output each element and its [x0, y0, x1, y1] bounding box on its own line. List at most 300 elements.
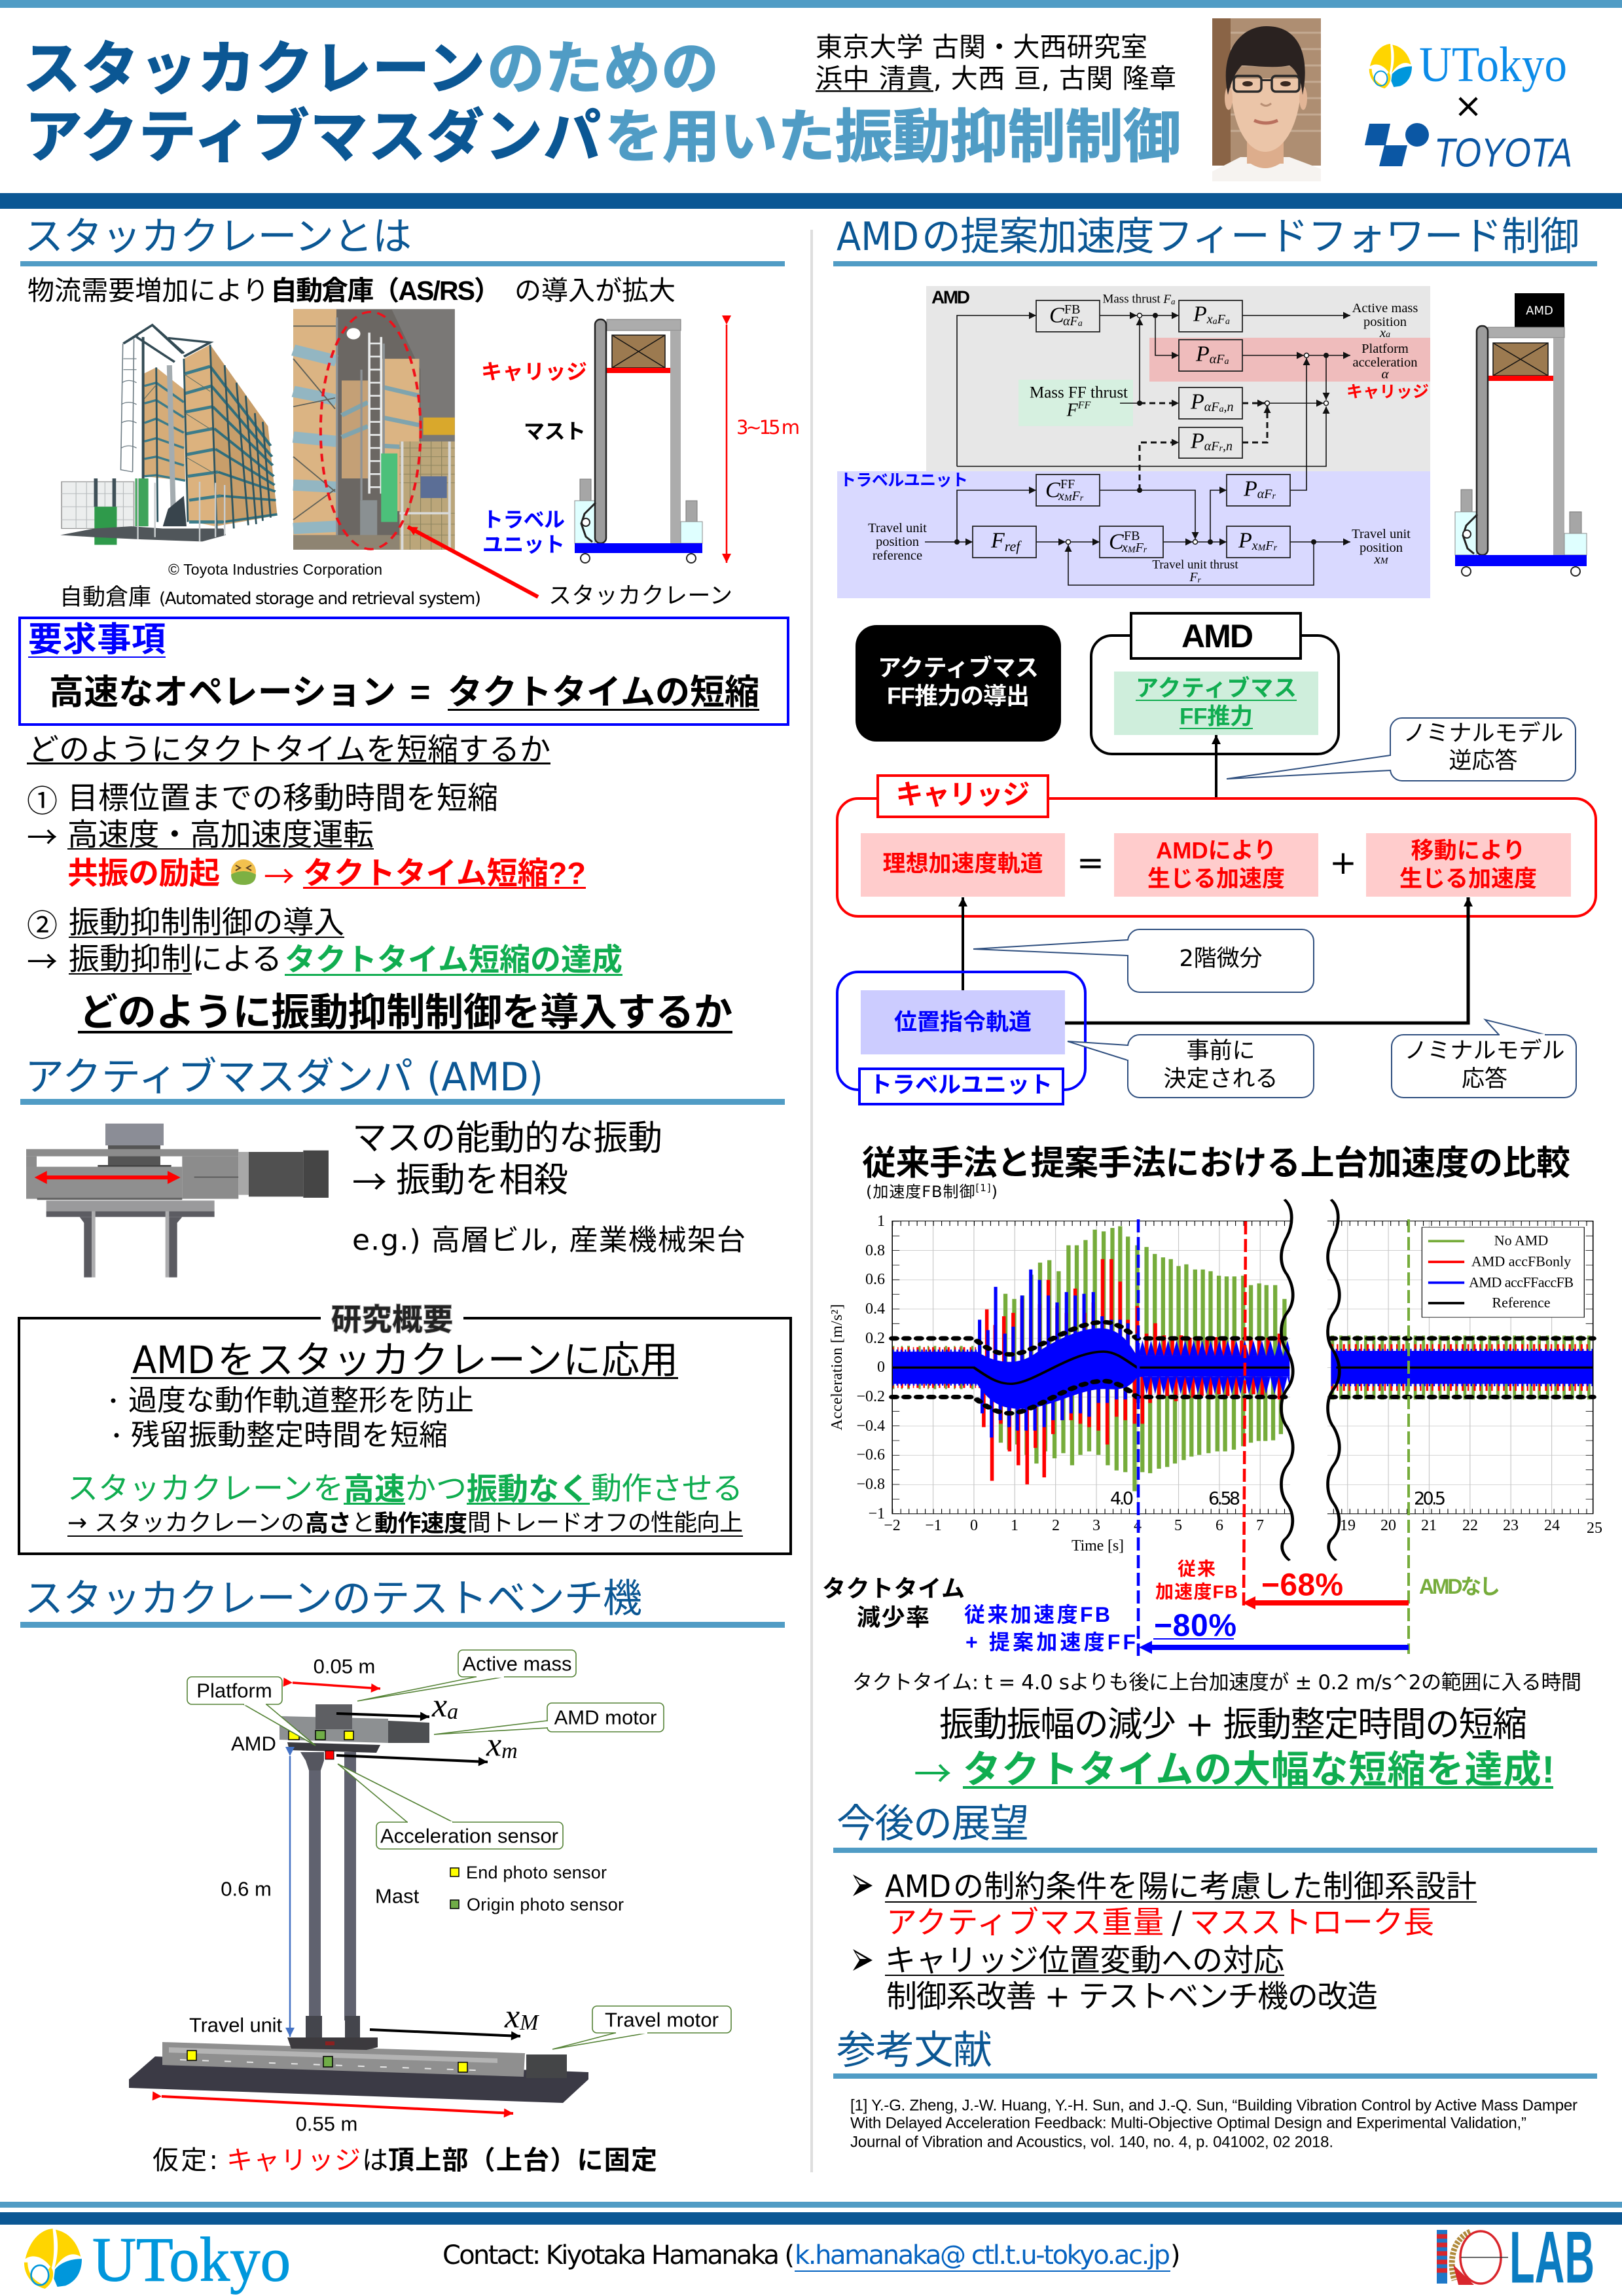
block labels: a	[1224, 356, 1229, 367]
crane labels	[60, 360, 800, 611]
block labels: x	[1206, 312, 1213, 327]
reference text: With Delayed Acceleration Feedback: Multi-Objective Optimal Design and Experimental Validation,”	[850, 2114, 1526, 2132]
block labels: P	[1191, 429, 1204, 453]
block labels: FB	[1064, 302, 1080, 317]
crane labels: 自動倉庫	[60, 584, 151, 611]
x axis labels: 7	[1256, 1517, 1264, 1534]
icon: sick emoji	[231, 859, 256, 885]
arrows from travel unit	[963, 897, 1468, 1023]
tact time reduction: 減少率	[857, 1604, 929, 1631]
callout: travel motor: Travel motor	[605, 2008, 719, 2032]
signal labels: Travel unit	[868, 521, 927, 535]
overview main statement: をスタッカクレーンに応用	[217, 1338, 678, 1382]
block labels: FF	[1060, 477, 1075, 492]
photo: warehouse	[60, 325, 278, 545]
assumption text: 仮定:	[153, 2145, 218, 2176]
callout: nominal inverse: 逆応答	[1449, 748, 1517, 774]
bench labels: Mast	[375, 1885, 420, 1907]
callout: nominal response	[1392, 1020, 1576, 1098]
crane labels: (Automated storage and retrieval system)	[159, 589, 481, 609]
x axis labels: 25	[1587, 1520, 1602, 1537]
overview bullets	[111, 1384, 474, 1452]
carriage group: 生じる加速度	[1147, 867, 1285, 891]
block labels: ,n	[1223, 439, 1233, 454]
AMD group: アクティブマス	[1136, 675, 1297, 702]
block labels: r	[1274, 543, 1278, 552]
chart legend	[1422, 1227, 1584, 1318]
text block: how to shorten tact time: タクトタイム短縮??	[303, 856, 586, 890]
callout: second derivative	[973, 929, 1314, 992]
chart title: )	[992, 1183, 998, 1201]
signal labels: position	[1360, 541, 1403, 555]
bullet one: マスストローク長	[1189, 1905, 1434, 1941]
assumption text: 頂上部（上台）に固定	[388, 2146, 657, 2175]
text block: how to shorten tact time	[27, 732, 622, 982]
bullet one	[853, 1869, 1477, 1941]
block diagram: トラベルユニット	[840, 471, 968, 490]
block diagram: キャリッジ	[1346, 383, 1429, 401]
y axis labels: 0.4	[865, 1300, 885, 1318]
intro text: の導入が拡大	[514, 275, 676, 306]
settling markers: 4.0	[1110, 1488, 1134, 1509]
intro text: 自動倉庫（AS/RS）	[270, 276, 501, 306]
conclusion: 振動振幅の減少 + 振動整定時間の短縮	[939, 1704, 1527, 1745]
block labels: F	[991, 529, 1005, 552]
column divider	[810, 230, 813, 2172]
overview conclusion: 振動なく	[467, 1471, 590, 1507]
crane labels: マスト	[524, 420, 586, 443]
AMD group	[1091, 613, 1339, 754]
y axis labels: −0.8	[856, 1476, 885, 1493]
axis break	[1281, 1197, 1339, 1562]
overview conclusion: 動作させる	[591, 1471, 743, 1507]
title: のための	[487, 37, 719, 101]
series: no AMD	[892, 1226, 1593, 1491]
block labels: F	[1072, 489, 1081, 503]
authors	[816, 31, 1176, 94]
x axis labels: 23	[1503, 1517, 1519, 1534]
block labels: P	[1193, 302, 1207, 326]
block labels: x	[1058, 489, 1064, 503]
legend labels: AMD accFBonly	[1471, 1253, 1571, 1270]
footer bars	[0, 2202, 1622, 2225]
tact time reduction: −68%	[1261, 1568, 1343, 1602]
legend labels	[1469, 1232, 1574, 1310]
heading: の提案加速度フィードフォワード制御	[922, 214, 1579, 260]
carriage group: 理想加速度軌道	[882, 851, 1043, 877]
title	[23, 37, 1181, 169]
signal labels: F	[1067, 401, 1078, 420]
tact time definition: タクトタイム: t = 4.0 sよりも後に上台加速度が ± 0.2 m/s^2の範囲に入る時間	[852, 1671, 1581, 1695]
panel: research overview	[19, 1302, 791, 1554]
callout: acceleration sensor	[338, 1764, 563, 1849]
signal labels: x	[1380, 325, 1386, 340]
reference and tolerance curves	[892, 1322, 1593, 1413]
settling markers: 20.5	[1414, 1488, 1446, 1509]
panel: acceleration comparison	[822, 1145, 1602, 1799]
header bottom bar	[0, 193, 1622, 209]
crane labels: ユニット	[482, 533, 565, 556]
logo: Toyota	[1365, 123, 1572, 175]
block labels: r	[1272, 491, 1276, 501]
panel: active mass damper	[20, 1054, 785, 1278]
heading: AMD	[837, 214, 919, 260]
contact	[442, 2240, 1181, 2272]
callout: platform: Platform	[196, 1679, 272, 1702]
intro text	[27, 275, 676, 306]
signal labels: position	[1363, 315, 1407, 329]
text block: how to shorten tact time: による	[192, 941, 282, 978]
bench labels: x	[432, 1687, 447, 1724]
key question: どのように振動抑制制御を導入するか	[79, 991, 732, 1034]
bullet two	[853, 1943, 1378, 2015]
crane labels: © Toyota Industries Corporation	[168, 561, 382, 578]
x axis labels: 1	[1011, 1517, 1018, 1534]
contact: Contact: Kiyotaka Hamanaka (	[442, 2240, 795, 2270]
signal labels: FF	[1077, 399, 1091, 411]
block labels: r	[1080, 493, 1084, 503]
tact time reduction: 従来	[1178, 1559, 1216, 1579]
bench labels: AMD	[231, 1732, 276, 1755]
signal lines	[925, 313, 1350, 585]
control blocks	[973, 300, 1290, 558]
chart title: (加速度FB制御	[866, 1183, 975, 1201]
bench labels: 0.6 m	[221, 1877, 272, 1901]
logo: Toyota: TOYOTA	[1434, 131, 1572, 175]
diagram: crane with AMD	[1455, 293, 1587, 576]
y axis labels	[829, 1213, 885, 1522]
x axis labels: −2	[884, 1517, 901, 1534]
chart title: [1]	[975, 1182, 991, 1194]
overview conclusion: 高さ	[305, 1509, 351, 1537]
callout: predetermined: 決定される	[1164, 1066, 1278, 1092]
contact: )	[1170, 2240, 1181, 2270]
block labels: a	[1225, 317, 1230, 326]
bench labels: m	[501, 1738, 518, 1763]
sensor legend	[450, 1863, 624, 1914]
tact time reduction: AMDなし	[1419, 1575, 1500, 1598]
overview conclusion: スタッカクレーンを	[67, 1471, 344, 1507]
photo: portrait	[1212, 18, 1321, 181]
x axis labels: 24	[1544, 1517, 1560, 1534]
text: AMD description	[352, 1118, 746, 1257]
block labels: r	[1219, 444, 1223, 453]
block labels: C	[1045, 478, 1060, 503]
signal labels: Travel unit thrust	[1152, 558, 1238, 572]
block labels: ,n	[1224, 400, 1233, 414]
bench labels: a	[447, 1699, 458, 1724]
crane labels: キャリッジ	[481, 360, 587, 384]
signal labels: reference	[873, 548, 922, 563]
block labels: r	[1144, 545, 1147, 555]
assumption text: は	[362, 2145, 388, 2176]
x axis labels: 21	[1421, 1517, 1437, 1534]
block diagram: AMD	[931, 287, 970, 308]
sensor legend: End photo sensor	[466, 1863, 607, 1882]
logo: UTokyo small: UTokyo	[1419, 37, 1567, 92]
contact: k.hamanaka@ ctl.t.u-tokyo.ac.jp	[795, 2240, 1170, 2270]
flow chart	[837, 613, 1596, 1104]
signal labels: α	[1381, 366, 1389, 382]
block labels: F	[1135, 541, 1144, 555]
block labels: αF	[1204, 400, 1219, 414]
photo: stacker crane in warehouse	[293, 309, 455, 550]
callout: AMD motor	[434, 1703, 664, 1734]
block labels: αF	[1257, 487, 1272, 501]
signal labels: x	[1375, 551, 1380, 567]
overview conclusion: → スタッカクレーンの	[67, 1509, 304, 1537]
text block: how to shorten tact time: 目標位置までの移動時間を短縮	[67, 780, 498, 817]
block labels: αF	[1063, 314, 1078, 329]
tact time reduction	[822, 1559, 1500, 1654]
black heading block: FF推力の導出	[887, 682, 1030, 709]
y axis labels: −0.6	[856, 1446, 885, 1463]
block labels: x	[1122, 541, 1128, 555]
text: AMD description: マスの能動的な振動	[352, 1118, 662, 1158]
legend labels: Reference	[1492, 1295, 1551, 1310]
x axis labels: 5	[1174, 1517, 1182, 1534]
overview conclusion: 動作速度	[374, 1509, 467, 1537]
title: アクティブマスダンパ	[25, 105, 601, 169]
chart title: 従来手法と提案手法における上台加速度の比較	[862, 1145, 1570, 1183]
carriage group: =	[1077, 844, 1104, 882]
heading: アクティブマスダンパ	[25, 1054, 413, 1100]
travel unit group: 位置指令軌道	[894, 1009, 1032, 1035]
black heading block: アクティブマス	[878, 655, 1039, 681]
y axis labels: −1	[868, 1505, 885, 1522]
y axis labels: 0.2	[865, 1330, 885, 1347]
overview bullets: 残留振動整定時間を短縮	[131, 1419, 448, 1452]
callout: travel motor	[552, 2006, 731, 2049]
y axis labels: 0.6	[865, 1271, 885, 1288]
text: AMD description: e.g.) 高層ビル, 産業機械架台	[352, 1224, 746, 1257]
bullet two: キャリッジ位置変動への対応	[885, 1943, 1284, 1979]
requirement box: 要求事項	[28, 621, 166, 659]
title: スタッカクレーン	[23, 37, 485, 101]
block labels: M	[1257, 543, 1267, 552]
panel: stacker crane intro	[20, 214, 800, 1034]
reference text: [1] Y.-G. Zheng, J.-W. Huang, Y.-H. Sun, and J.-Q. Sun, “Building Vibration Control by Active Mass Damper	[850, 2097, 1577, 2114]
text block: how to shorten tact time: →	[27, 937, 58, 982]
y axis labels: 0	[877, 1359, 885, 1376]
callout: AMD motor: AMD motor	[554, 1706, 657, 1729]
x axis labels	[884, 1517, 1602, 1554]
authors: 東京大学 古関・大西研究室	[816, 31, 1147, 63]
text block: how to shorten tact time: ①	[27, 776, 58, 821]
panel: test bench	[20, 1576, 785, 2176]
cross sign: ×	[1454, 86, 1483, 126]
bullet one: の制約条件を陽に考慮した制御系設計	[953, 1869, 1477, 1905]
callout: predetermined	[1068, 1035, 1314, 1098]
x axis labels: 0	[970, 1517, 978, 1534]
title: を用いた振動抑制制御	[605, 105, 1181, 169]
travel unit group	[837, 972, 1085, 1104]
block labels: P	[1238, 529, 1252, 552]
line chart	[892, 1197, 1593, 1562]
series: AMD acc FB only	[892, 1259, 1593, 1484]
block labels: a	[1078, 318, 1083, 329]
tact time reduction: 従来加速度FB	[964, 1603, 1110, 1626]
logo: UTokyo small	[1370, 37, 1567, 92]
block labels: C	[1049, 304, 1064, 327]
block labels: a	[1219, 404, 1224, 414]
signal labels: Mass FF thrust	[1030, 384, 1128, 402]
block labels: αF	[1204, 439, 1219, 454]
text block: how to shorten tact time: 共振の励起	[67, 856, 220, 890]
signal labels: Platform	[1361, 342, 1409, 356]
block labels: F	[1217, 312, 1226, 327]
block labels: FB	[1124, 529, 1140, 543]
crane labels: 3~15 m	[736, 416, 800, 439]
overview conclusion: と	[351, 1509, 375, 1537]
tact time reduction: 加速度FB	[1155, 1581, 1238, 1602]
bullet two: 制御系改善 + テストベンチ機の改造	[886, 1979, 1378, 2015]
x axis labels: 6	[1216, 1517, 1223, 1534]
assumption text: キャリッジ	[226, 2145, 361, 2176]
heading: 今後の展望	[837, 1801, 1029, 1847]
diagram: stacker crane schematic	[575, 319, 727, 563]
callout: nominal inverse	[1227, 718, 1576, 781]
x axis labels: Time [s]	[1072, 1537, 1124, 1554]
signal labels: F	[1189, 570, 1198, 584]
crane labels: トラベル	[482, 508, 565, 531]
text: AMD description: →	[352, 1155, 387, 1205]
x axis labels: 22	[1462, 1517, 1478, 1534]
block labels: C	[1109, 530, 1124, 554]
panel title: 研究概要	[331, 1302, 453, 1336]
image: test bench base	[129, 2016, 588, 2113]
conclusion: タクトタイムの大幅な短縮を達成!	[963, 1749, 1555, 1791]
signal labels: M	[1380, 556, 1389, 565]
panel: proposed feedforward control	[833, 214, 1597, 1104]
callout: predetermined: 事前に	[1186, 1038, 1255, 1064]
signal labels: position	[876, 535, 919, 549]
overview conclusion	[67, 1471, 743, 1537]
callout: nominal response: 応答	[1462, 1066, 1507, 1092]
legend labels: AMD accFFaccFB	[1469, 1274, 1574, 1291]
y axis labels: −0.4	[856, 1418, 885, 1435]
callout: second derivative: 2階微分	[1180, 946, 1262, 972]
y axis labels: Acceleration [m/s²]	[829, 1304, 846, 1431]
callout: nominal inverse: ノミナルモデル	[1403, 721, 1563, 747]
block labels: F	[1265, 539, 1274, 553]
text block: how to shorten tact time: 高速度・高加速度運転	[67, 817, 374, 853]
x axis labels: 3	[1092, 1517, 1100, 1534]
x axis labels: 19	[1340, 1517, 1356, 1534]
overview conclusion: かつ	[405, 1471, 467, 1507]
heading: スタッカクレーンのテストベンチ機	[24, 1576, 642, 1622]
reference text: Journal of Vibration and Acoustics, vol. 140, no. 4, p. 041002, 02 2018.	[850, 2134, 1333, 2151]
overview conclusion: 高速	[344, 1471, 405, 1507]
crane labels: スタッカクレーン	[549, 583, 732, 609]
x axis labels: −1	[925, 1517, 942, 1534]
carriage group: キャリッジ	[895, 779, 1030, 810]
bench labels: M	[519, 2011, 539, 2034]
block labels: a	[1213, 317, 1217, 326]
callout: nominal response: ノミナルモデル	[1405, 1038, 1564, 1064]
overview main statement: AMD	[132, 1338, 215, 1382]
bench labels: Travel unit	[189, 2013, 282, 2037]
callout: active mass	[357, 1650, 576, 1701]
black heading block	[856, 625, 1061, 742]
heading: 参考文献	[837, 2028, 992, 2073]
arrow to AMD	[1215, 735, 1217, 833]
bench labels	[189, 1655, 539, 2135]
signal labels: Mass thrust F	[1102, 292, 1171, 306]
bullet one: アクティブマス重量	[886, 1905, 1164, 1941]
heading: スタッカクレーンとは	[24, 214, 412, 260]
bench labels: x	[505, 1998, 520, 2036]
series: AMD acc FF + FB	[892, 1270, 1593, 1437]
tact time reduction: タクトタイム	[822, 1575, 965, 1602]
bullet one: AMD	[885, 1869, 951, 1905]
block diagram	[837, 286, 1430, 598]
x axis labels: 20	[1380, 1517, 1396, 1534]
block labels: M	[1064, 493, 1073, 503]
header top bar	[0, 0, 1622, 8]
signal labels: acceleration	[1352, 355, 1418, 370]
chart title	[862, 1145, 1570, 1201]
carriage group	[837, 776, 1596, 916]
y axis labels: −0.2	[856, 1388, 885, 1405]
y axis labels: 1	[877, 1213, 885, 1230]
callout: platform	[187, 1677, 315, 1746]
x axis labels: 2	[1052, 1517, 1060, 1534]
requirement box: タクトタイムの短縮	[448, 673, 759, 712]
requirement box	[20, 618, 788, 725]
bullet one: /	[1172, 1905, 1182, 1941]
signal labels: a	[1386, 330, 1390, 339]
AMD group: FF推力	[1180, 704, 1253, 729]
legend labels: No AMD	[1494, 1232, 1548, 1249]
signal labels: a	[1171, 296, 1176, 306]
signal labels	[868, 292, 1418, 584]
text block: how to shorten tact time: タクトタイム短縮の達成	[285, 942, 622, 977]
block labels: ref	[1005, 538, 1022, 554]
panel: references	[833, 2028, 1597, 2151]
text block: how to shorten tact time: 振動抑制制御の導入	[69, 905, 344, 941]
carriage group: 移動により	[1411, 838, 1525, 864]
text block: how to shorten tact time: ②	[27, 901, 58, 945]
conclusion: →	[914, 1744, 952, 1799]
bench labels: 0.55 m	[296, 2113, 357, 2135]
AMD group: AMD	[1181, 618, 1253, 655]
callout: acceleration sensor: Acceleration sensor	[380, 1825, 558, 1847]
requirement box: 高速なオペレーション	[49, 673, 396, 712]
tact time reduction: + 提案加速度FF	[965, 1630, 1136, 1654]
image: AMD render	[26, 1124, 329, 1278]
y axis labels: 0.8	[865, 1242, 885, 1259]
text: AMD description: 振動を相殺	[396, 1160, 568, 1200]
assumption text	[153, 2145, 657, 2176]
block labels: x	[1252, 539, 1258, 553]
requirement box: =	[410, 673, 430, 712]
text block: how to shorten tact time: 振動抑制	[69, 941, 192, 978]
block labels	[990, 302, 1278, 555]
signal labels: Travel unit	[1352, 527, 1411, 541]
block labels: M	[1127, 545, 1136, 555]
settling markers: 6.58	[1208, 1488, 1240, 1509]
text block: how to shorten tact time: どのようにタクトタイムを短縮するか	[28, 732, 550, 768]
bench labels: 0.05 m	[314, 1655, 375, 1678]
tact time reduction: −80%	[1154, 1609, 1236, 1643]
bench labels: x	[486, 1727, 501, 1763]
block labels: αF	[1210, 352, 1225, 367]
signal labels: Active mass	[1352, 301, 1418, 315]
settling markers	[1110, 1219, 1446, 1656]
callout: active mass: Active mass	[462, 1652, 572, 1676]
logo: KOLAB	[1437, 2216, 1595, 2296]
